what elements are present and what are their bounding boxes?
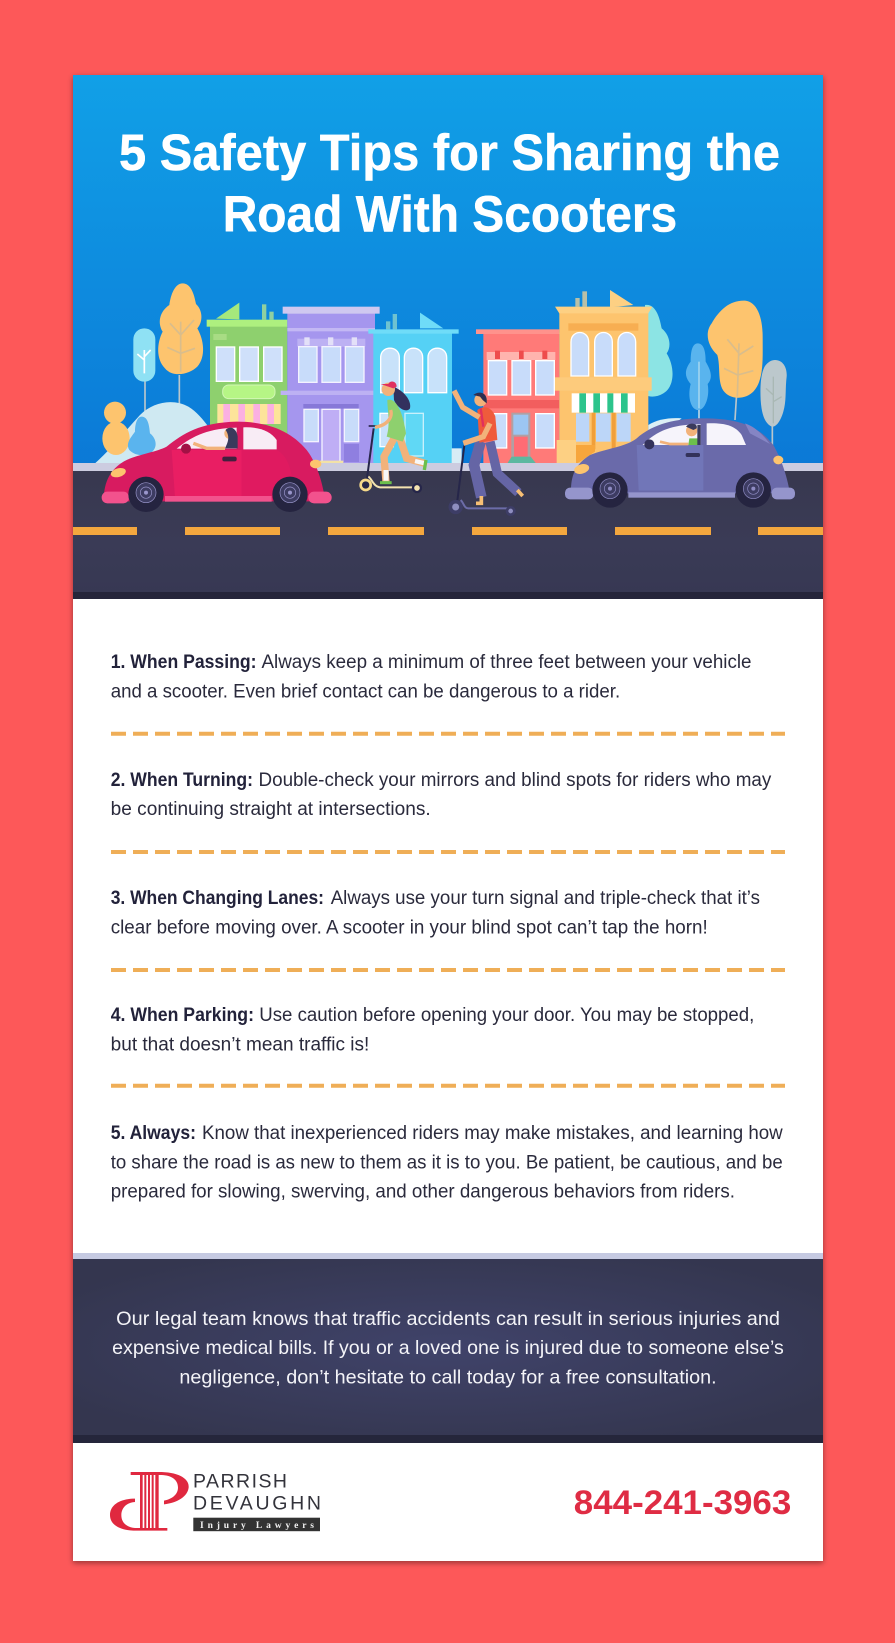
tip 4: 4. When Parking: — [111, 1005, 254, 1026]
call to action text: expensive medical bills. If you or a loved one is injured due to someone else’s — [112, 1337, 784, 1359]
icon: tall yellow tree — [158, 283, 203, 420]
wheels — [592, 472, 771, 508]
scooter — [361, 426, 421, 492]
divider 4 — [111, 1084, 785, 1088]
divider 3 — [111, 968, 785, 972]
icon: hill — [95, 402, 208, 463]
tip 5: prepared for slowing, swerving, and other dangerous behaviors from riders. — [111, 1182, 735, 1203]
tip 4 — [111, 1005, 754, 1055]
icon: pale blue tree — [133, 328, 155, 415]
tip 2: Double-check your mirrors and blind spots for riders who may — [258, 770, 772, 791]
panel: green building — [207, 303, 287, 463]
icon: small hill — [648, 418, 682, 440]
driver — [193, 428, 238, 448]
icon: grey tree — [760, 360, 787, 445]
icon: big yellow tree — [708, 301, 763, 420]
icon: blue bush — [128, 417, 156, 455]
divider 1 — [111, 732, 785, 736]
title: 5 Safety Tips for Sharing the — [119, 124, 780, 181]
tip 3: clear before moving over. A scooter in your blind spot can’t tap the horn! — [111, 917, 708, 938]
tip 2: 2. When Turning: — [111, 770, 253, 791]
logo wordmark: PARRISH — [193, 1471, 287, 1493]
street illustration right half — [476, 290, 787, 463]
title — [119, 124, 780, 243]
title: Road With Scooters — [223, 186, 677, 243]
call to action text — [112, 1308, 784, 1389]
purple car — [565, 418, 795, 508]
tip 1: and a scooter. Even brief contact can be dangerous to a rider. — [111, 682, 620, 702]
driver — [660, 424, 701, 445]
logo — [110, 1471, 321, 1531]
street illustration left half — [95, 283, 462, 463]
icon: small yellow tree — [102, 402, 130, 455]
panel: cyan building — [368, 313, 462, 463]
panel: main card — [73, 75, 823, 1561]
icon: pale cyan tree — [645, 305, 673, 397]
red car — [102, 422, 332, 512]
tip 1: 1. When Passing: — [111, 652, 256, 673]
phone number: 844-241-3963 — [574, 1484, 791, 1522]
panel: purple building — [281, 307, 380, 463]
tip 3: 3. When Changing Lanes: — [111, 888, 324, 909]
wheels — [128, 477, 308, 512]
lane markings — [73, 527, 823, 535]
panel: red building — [476, 329, 559, 463]
tip 4: Use caution before opening your door. You may be stopped, — [259, 1005, 754, 1026]
panel: road — [73, 471, 823, 599]
scooter — [450, 445, 514, 515]
man on scooter — [450, 391, 523, 515]
tip 5: 5. Always: — [111, 1123, 196, 1144]
panel: call to action — [73, 1253, 823, 1443]
logo wordmark — [193, 1471, 321, 1531]
tip 1 — [111, 652, 751, 702]
tip 3 — [111, 888, 760, 938]
logo wordmark: DEVAUGHN — [193, 1492, 321, 1514]
tip 2 — [111, 770, 772, 820]
sidewalk — [73, 463, 823, 471]
panel: yellow building — [555, 290, 652, 463]
call to action text: Our legal team knows that traffic accidents can result in serious injuries and — [116, 1308, 780, 1330]
call to action text: negligence, don’t hesitate to call today for a free consultation. — [179, 1367, 717, 1389]
panel: sky header — [73, 75, 823, 475]
tip 4: but that doesn’t mean traffic is! — [111, 1034, 369, 1055]
icon: blue tree — [686, 343, 711, 418]
tip 5: Know that inexperienced riders may make mistakes, and learning how — [202, 1123, 783, 1144]
tip 1: Always keep a minimum of three feet between your vehicle — [262, 652, 752, 673]
tip 3: Always use your turn signal and triple-check that it’s — [331, 888, 760, 909]
logo wordmark: Injury Lawyers — [200, 1521, 314, 1531]
logo mark — [110, 1472, 189, 1531]
tip 2: be continuing straight at intersections. — [111, 799, 431, 820]
woman on scooter — [361, 381, 426, 492]
tip 5: to share the road is as new to them as it is to you. Be patient, be cautious, and be — [111, 1152, 783, 1173]
divider 2 — [111, 850, 785, 854]
tip 5 — [111, 1123, 783, 1203]
